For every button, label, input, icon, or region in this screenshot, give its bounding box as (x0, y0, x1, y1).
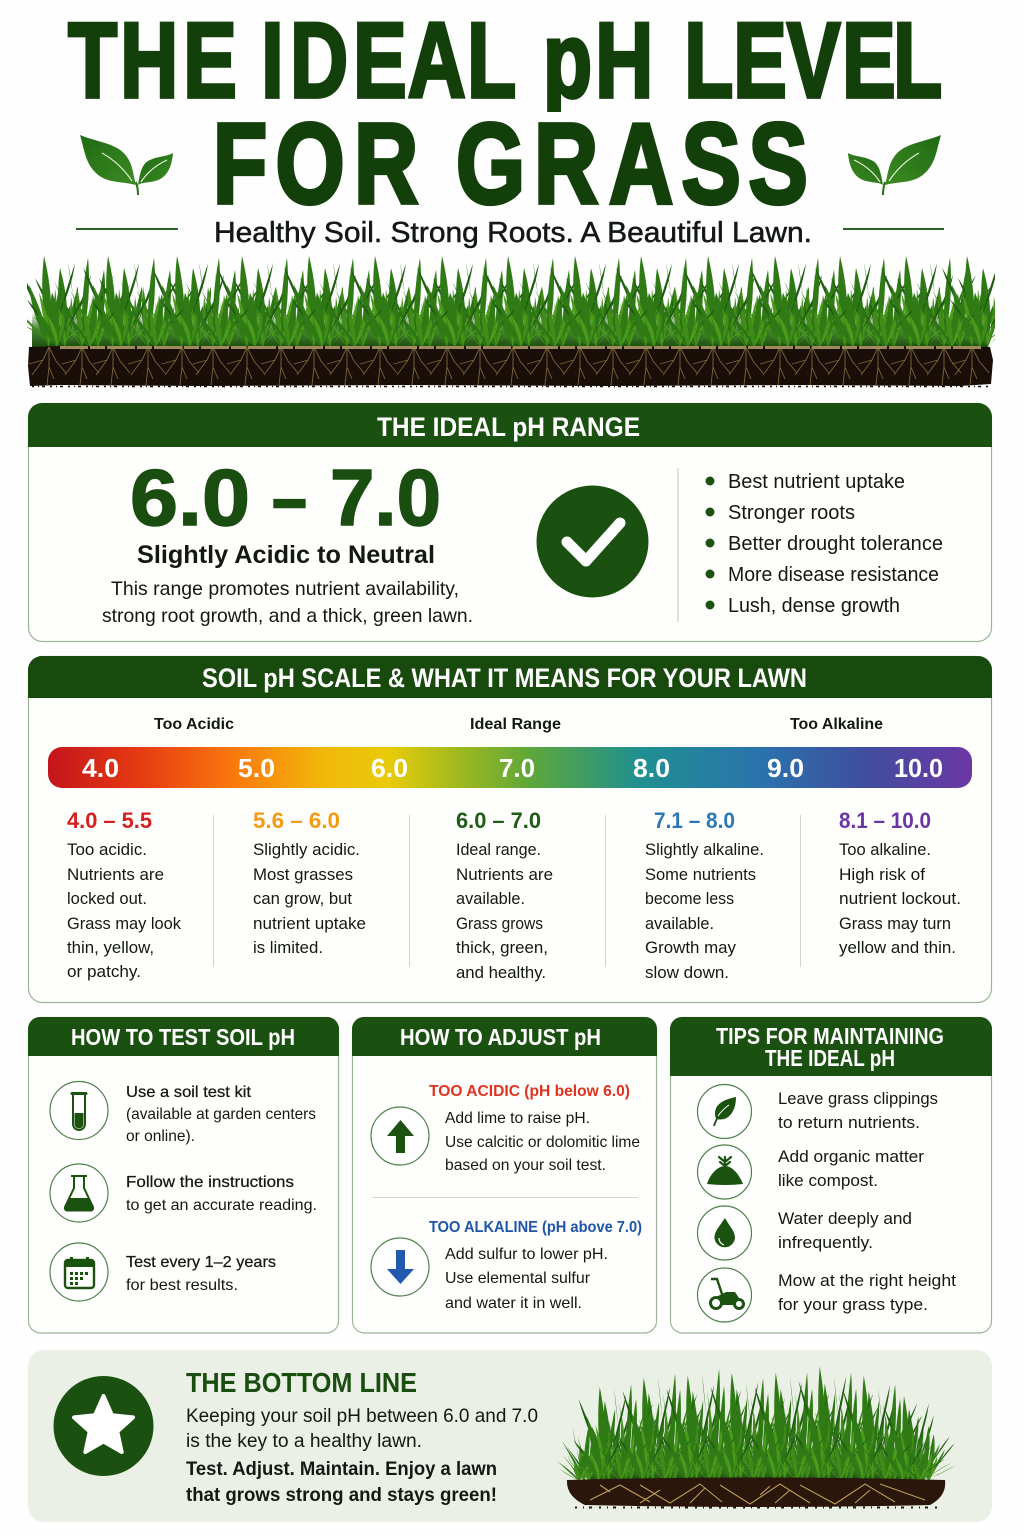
tip: watering (778, 1209, 912, 1252)
step text: test frequency: for best results. (126, 1277, 238, 1294)
column: 8.1 to 10.0: Grass may turn (839, 914, 951, 933)
column: 4.0 to 5.5: Too acidic. (67, 840, 147, 859)
step text: soil test kit: (available at garden centers (126, 1106, 316, 1123)
benefits list: Better drought tolerance (728, 533, 943, 555)
benefits list: Best nutrient uptake (728, 471, 905, 493)
too acidic advice (445, 1110, 640, 1174)
column: 7.1 to 8.0: Growth may (645, 938, 736, 957)
pH colour bar: 4.0 (82, 753, 119, 783)
icon: flask (50, 1164, 108, 1222)
column: 4.0 to 5.5: thin, yellow, (67, 938, 154, 957)
pH colour bar (48, 747, 972, 788)
column: 5.6 to 6.0: Slightly acidic. (253, 840, 360, 859)
bottom line message: that grows strong and stays green! (186, 1485, 497, 1506)
too acidic advice: Use calcitic or dolomitic lime (445, 1134, 640, 1151)
bottom line message: Keeping your soil pH between 6.0 and 7.0 (186, 1406, 538, 1427)
pH colour bar: 7.0 (499, 753, 535, 783)
big range value: 7.0 (330, 453, 441, 542)
panel header: HOW TO ADJUST pH (400, 1024, 601, 1050)
column: 6.0 to 7.0: and healthy. (456, 963, 546, 982)
pH colour bar: 9.0 (767, 753, 804, 783)
pH colour bar: 10.0 (894, 753, 943, 783)
column: 4.0 to 5.5 (67, 808, 181, 981)
panel header (352, 1017, 657, 1056)
range description: strong root growth, and a thick, green lawn. (102, 605, 473, 627)
title: THE IDEAL pH LEVEL (68, 1, 942, 121)
tip: watering: infrequently. (778, 1233, 873, 1252)
column: 6.0 to 7.0: 6.0 – 7.0 (456, 808, 541, 833)
panel header: HOW TO TEST SOIL pH (71, 1024, 295, 1050)
step text: follow instructions (126, 1174, 317, 1214)
step text: soil test kit: or online). (126, 1128, 195, 1145)
column: 6.0 to 7.0: Ideal range. (456, 840, 541, 859)
column: 5.6 to 6.0: 5.6 – 6.0 (253, 808, 340, 833)
panel header: SOIL pH SCALE & WHAT IT MEANS FOR YOUR LAWN (202, 663, 807, 693)
panel: how to test soil pH (28, 1017, 339, 1333)
bottom line message: Test. Adjust. Maintain. Enjoy a lawn (186, 1459, 497, 1480)
step text: soil test kit (126, 1084, 316, 1145)
subtitle: Healthy Soil. Strong Roots. A Beautiful Lawn. (214, 217, 812, 249)
icon: check mark (536, 486, 648, 598)
bottom line message (186, 1406, 538, 1506)
tip: mowing: Mow at the right height (778, 1271, 956, 1290)
too acidic heading: TOO ACIDIC (pH below 6.0) (429, 1083, 630, 1100)
too alkaline heading: TOO ALKALINE (pH above 7.0) (429, 1219, 642, 1236)
panel header (28, 403, 992, 447)
benefits list: More disease resistance (728, 564, 939, 586)
column: 6.0 to 7.0: Nutrients are (456, 865, 553, 884)
icon: up arrow (371, 1107, 429, 1165)
title (68, 21, 942, 206)
panel header (28, 1017, 339, 1056)
tip: watering: Water deeply and (778, 1209, 912, 1228)
zone labels: Too Alkaline (790, 716, 883, 733)
bottom line message: is the key to a healthy lawn. (186, 1431, 422, 1452)
column: 8.1 to 10.0: 8.1 – 10.0 (839, 808, 931, 833)
column: 7.1 to 8.0 (645, 808, 764, 982)
too alkaline advice: Use elemental sulfur (445, 1270, 591, 1287)
panel header: TIPS FOR MAINTAINING (716, 1023, 944, 1049)
tip: clippings (778, 1089, 938, 1132)
too alkaline advice: and water it in well. (445, 1295, 582, 1312)
illustration: grass with soil and roots (17, 256, 1018, 386)
column: 5.6 to 6.0: nutrient uptake (253, 914, 366, 933)
column: 6.0 to 7.0: available. (456, 889, 525, 908)
panel: soil pH scale (28, 656, 992, 1002)
step text: follow instructions: Follow the instructions (126, 1174, 294, 1191)
icon: left leaves (80, 135, 173, 195)
tip: organic matter (778, 1147, 924, 1190)
step text: test frequency (126, 1254, 276, 1294)
column: 7.1 to 8.0: Some nutrients (645, 865, 756, 884)
column: 8.1 to 10.0: yellow and thin. (839, 938, 956, 957)
panel: ideal pH range (28, 403, 992, 642)
zone labels: Too Acidic (154, 716, 234, 733)
icon: star badge (54, 1376, 154, 1476)
icon: leaf (698, 1084, 752, 1138)
big range value (130, 453, 441, 542)
tip: clippings: to return nutrients. (778, 1113, 920, 1132)
column: 4.0 to 5.5: Grass may look (67, 914, 181, 933)
column: 4.0 to 5.5: or patchy. (67, 962, 141, 981)
column: 8.1 to 10.0 (839, 808, 961, 957)
title: FOR GRASS (213, 99, 808, 228)
column: 7.1 to 8.0: slow down. (645, 963, 729, 982)
tip: organic matter: like compost. (778, 1171, 878, 1190)
too acidic advice: based on your soil test. (445, 1157, 606, 1174)
icon: calendar (50, 1243, 108, 1301)
column: 5.6 to 6.0: is limited. (253, 938, 323, 957)
tip: mowing: for your grass type. (778, 1295, 928, 1314)
step text: test frequency: Test every 1–2 years (126, 1254, 276, 1271)
range label: Slightly Acidic to Neutral (137, 541, 435, 569)
column: 4.0 to 5.5: Nutrients are (67, 865, 164, 884)
zone labels: Ideal Range (470, 716, 561, 733)
too acidic advice: Add lime to raise pH. (445, 1110, 590, 1127)
tip: organic matter: Add organic matter (778, 1147, 924, 1166)
icon: test tube (50, 1082, 108, 1140)
icon: lawn mower (698, 1268, 752, 1322)
icon: right leaves (848, 135, 941, 195)
column: 5.6 to 6.0: Most grasses (253, 865, 353, 884)
panel header (28, 656, 992, 698)
column: 6.0 to 7.0: thick, green, (456, 938, 548, 957)
step text: soil test kit: Use a soil test kit (126, 1084, 252, 1101)
column: 6.0 to 7.0: Grass grows (456, 914, 543, 933)
column: 7.1 to 8.0: available. (645, 914, 714, 933)
icon: compost mound (698, 1145, 752, 1199)
range description (102, 578, 473, 627)
column: 4.0 to 5.5: locked out. (67, 889, 147, 908)
tip: clippings: Leave grass clippings (778, 1089, 938, 1108)
big range value: 6.0 (130, 453, 250, 542)
big range value: – (272, 453, 307, 542)
pH colour bar: 6.0 (371, 753, 408, 783)
benefits list (706, 471, 943, 617)
panel header (670, 1017, 992, 1076)
too alkaline advice: Add sulfur to lower pH. (445, 1246, 608, 1263)
panel: the bottom line (28, 1350, 992, 1522)
illustration: grass clump (557, 1366, 956, 1508)
bottom line heading: THE BOTTOM LINE (186, 1367, 417, 1398)
panel header: THE IDEAL pH (765, 1045, 895, 1071)
icon: water drop (698, 1206, 752, 1260)
tip: mowing (778, 1271, 956, 1314)
column: 7.1 to 8.0: 7.1 – 8.0 (654, 808, 735, 833)
column: 5.6 to 6.0 (253, 808, 366, 957)
panel header: THE IDEAL pH RANGE (377, 412, 640, 442)
column: 8.1 to 10.0: nutrient lockout. (839, 889, 961, 908)
range description: This range promotes nutrient availability, (111, 578, 459, 600)
zone labels (154, 716, 883, 733)
step text: follow instructions: to get an accurate reading. (126, 1197, 317, 1214)
icon: down arrow (371, 1238, 429, 1296)
pH colour bar: 5.0 (238, 753, 275, 783)
pH colour bar: 8.0 (633, 753, 670, 783)
panel: how to adjust pH (352, 1017, 657, 1333)
column: 8.1 to 10.0: Too alkaline. (839, 840, 931, 859)
benefits list: Stronger roots (728, 502, 855, 524)
column: 7.1 to 8.0: Slightly alkaline. (645, 840, 764, 859)
column: 7.1 to 8.0: become less (645, 889, 734, 908)
column: 8.1 to 10.0: High risk of (839, 865, 925, 884)
column: 6.0 to 7.0 (456, 808, 553, 982)
benefits list: Lush, dense growth (728, 595, 900, 617)
panel: maintenance tips (670, 1017, 992, 1333)
too alkaline advice (445, 1246, 608, 1312)
column: 5.6 to 6.0: can grow, but (253, 889, 352, 908)
column: 4.0 to 5.5: 4.0 – 5.5 (67, 808, 152, 833)
